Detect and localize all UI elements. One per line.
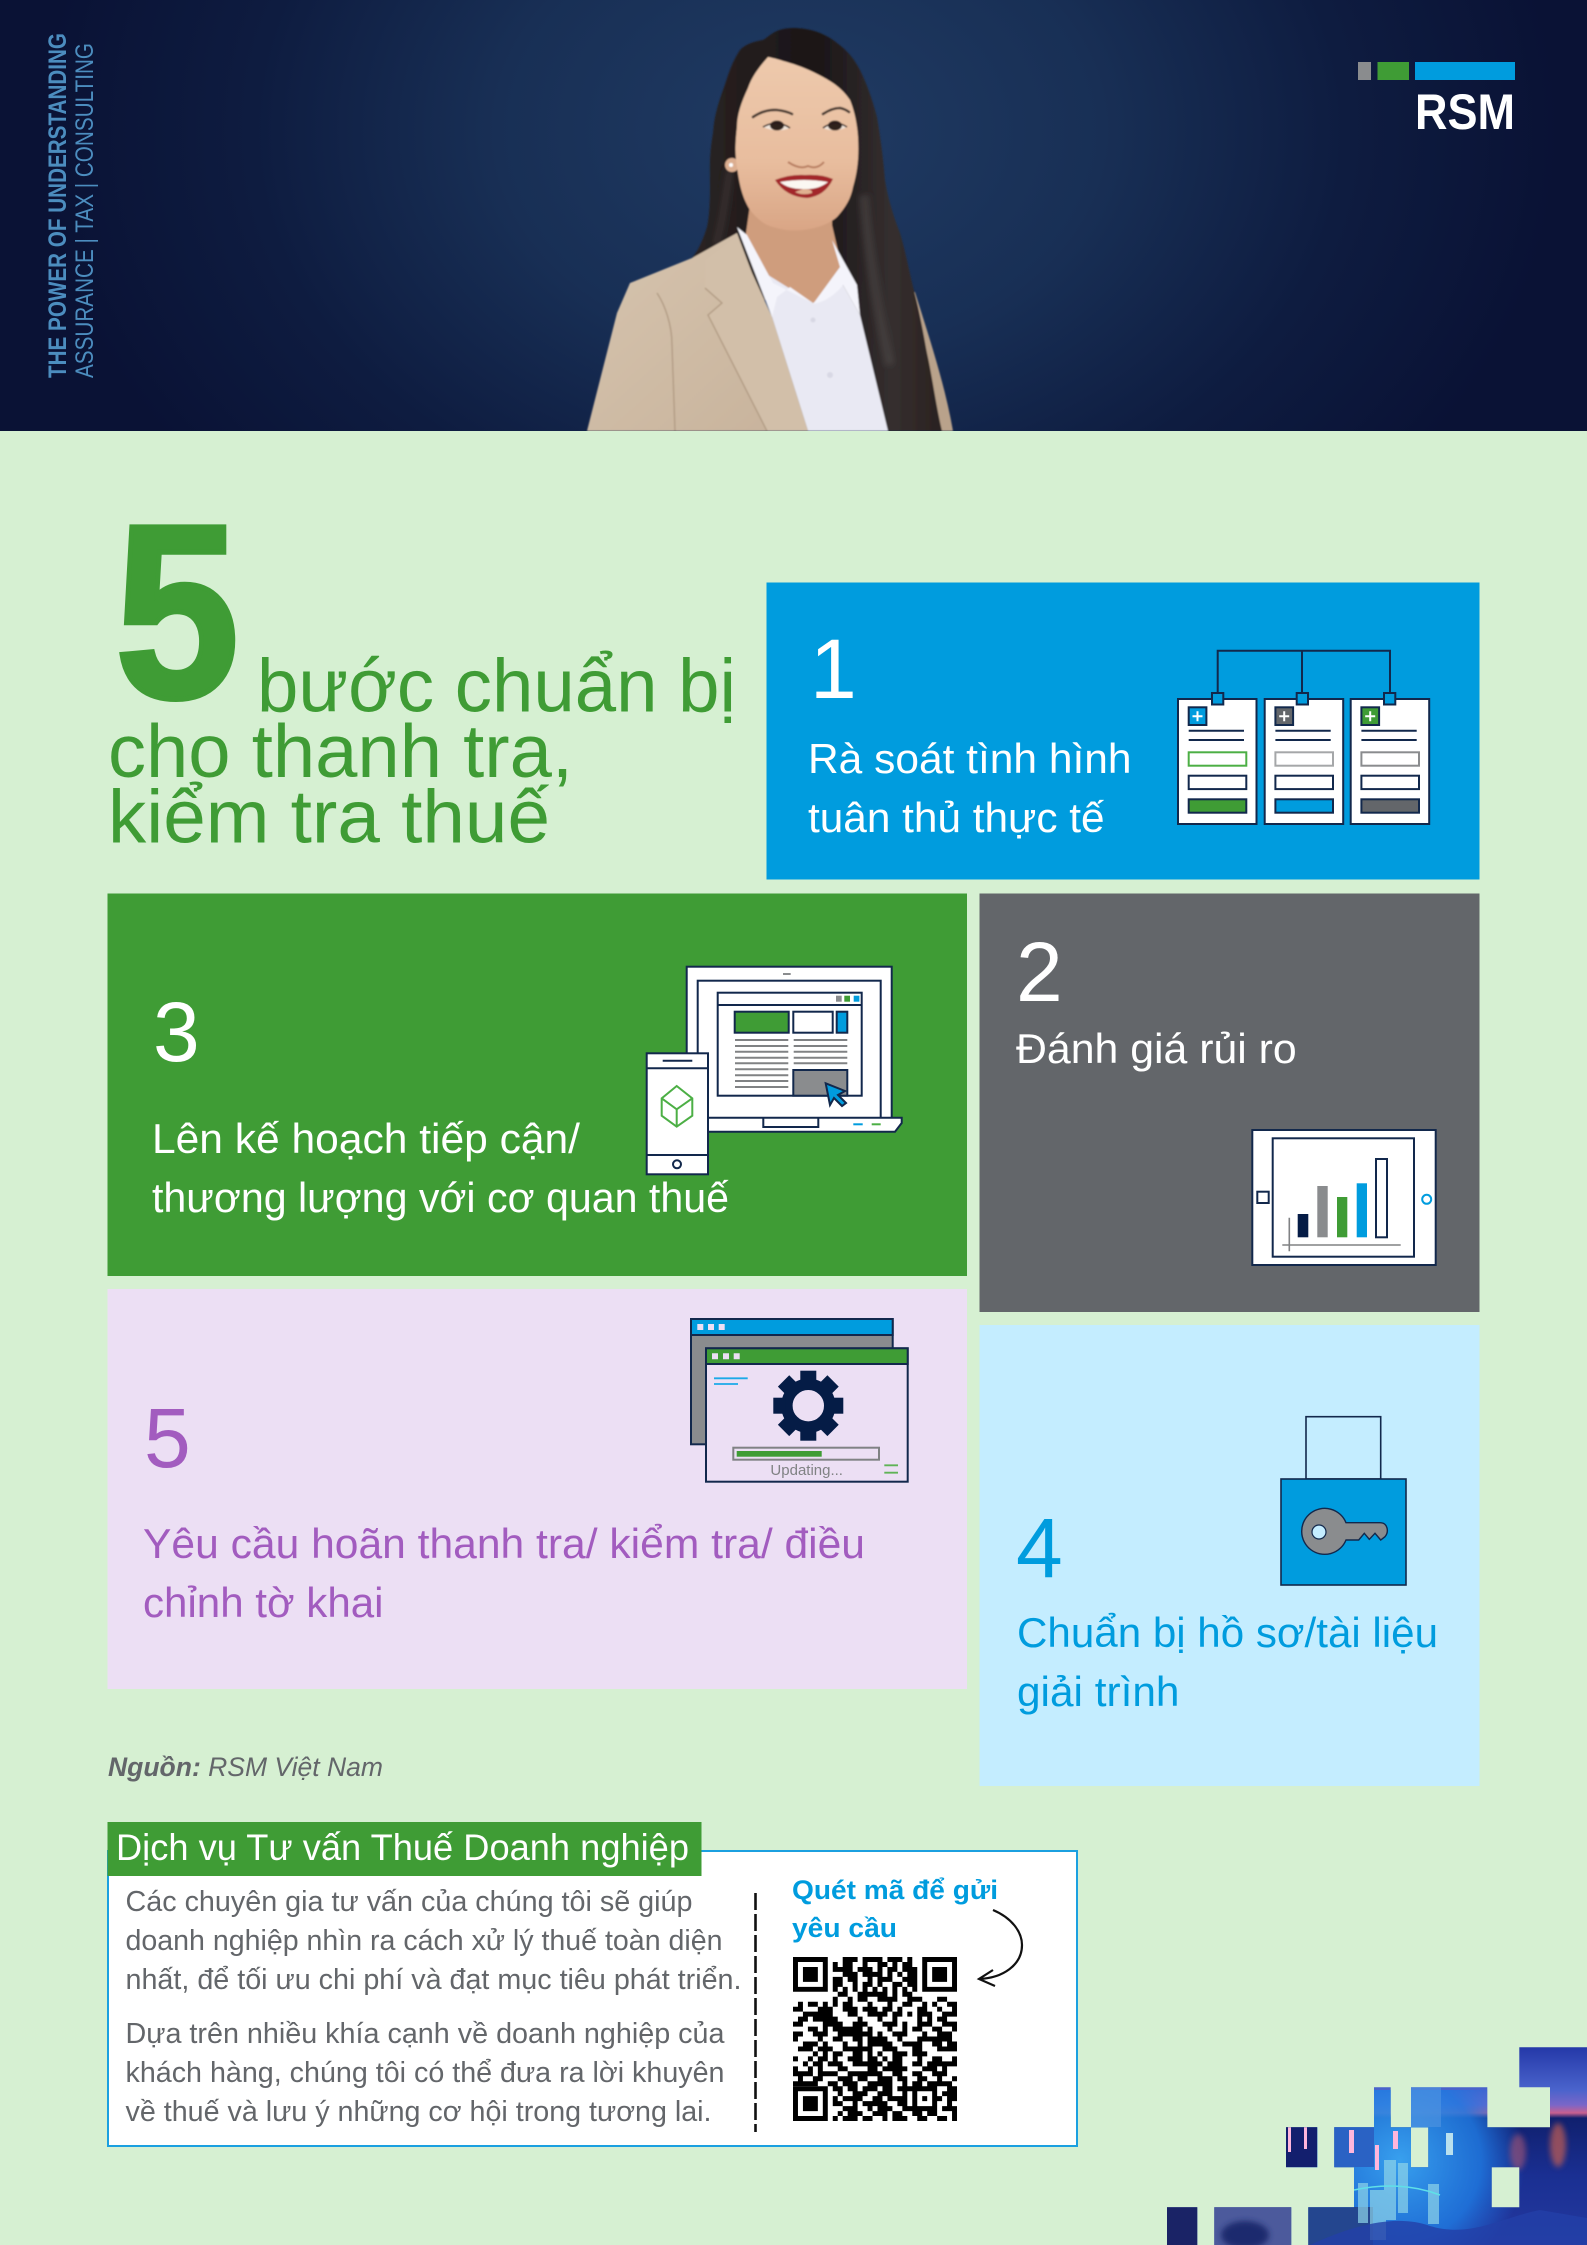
panel: step 4: giải trình [1017, 1668, 1180, 1715]
panel: step 2: Đánh giá rủi ro [1016, 1025, 1297, 1072]
service heading: Dịch vụ Tư vấn Thuế Doanh nghiệp [116, 1827, 689, 1868]
service description: doanh nghiệp nhìn ra cách xử lý thuế toàn diện [126, 1925, 722, 1957]
panel: step 4 [980, 1325, 1480, 1786]
service description: Dựa trên nhiều khía cạnh về doanh nghiệp của [126, 2018, 725, 2050]
title: 5 bước chuẩn bị cho thanh tra, kiểm tra thuế: bước chuẩn bị [257, 644, 736, 728]
icon: three checklists [1178, 651, 1429, 824]
icon: tablet with bar chart [1252, 1130, 1436, 1265]
title: 5 bước chuẩn bị cho thanh tra, kiểm tra thuế: kiểm tra thuế [108, 774, 550, 858]
service description: nhất, để tối ưu chi phí và đạt mục tiêu phát triển. [126, 1964, 742, 1996]
icon: padlock with key [1281, 1417, 1406, 1585]
panel: step 2: 2 [1016, 925, 1063, 1019]
QR call to action: yêu cầu [792, 1913, 897, 1943]
service description [126, 1886, 742, 2128]
panel: step 1 [766, 582, 1480, 880]
panel: corporate tax advisory service [108, 1822, 1077, 2146]
panel: step 4: 4 [1016, 1501, 1063, 1595]
panel: step 5: chỉnh tờ khai [143, 1579, 384, 1626]
QR code [793, 1957, 957, 2121]
panel: step 3: Lên kế hoạch tiếp cận/ [152, 1115, 580, 1162]
icon: software update windows with gear [691, 1319, 908, 1482]
icon: laptop and phone [647, 967, 902, 1174]
vertical tagline [44, 33, 99, 378]
source note: Nguồn: RSM Việt Nam [108, 1752, 383, 1782]
panel: step 1: 1 [810, 622, 857, 716]
title: 5 bước chuẩn bị cho thanh tra, kiểm tra thuế [108, 473, 736, 858]
panel: step 4: Chuẩn bị hồ sơ/tài liệu [1017, 1609, 1438, 1656]
panel: step 1: Rà soát tình hình [808, 735, 1132, 782]
panel: step 3: 3 [153, 985, 200, 1079]
QR call to action: Quét mã để gửi [792, 1875, 998, 1905]
service description: Các chuyên gia tư vấn của chúng tôi sẽ giúp [126, 1886, 692, 1918]
decorative city skyline mosaic [1160, 2040, 1587, 2245]
RSM logo: RSM [1415, 84, 1515, 140]
header banner [0, 0, 1587, 431]
panel: step 5 [108, 1289, 967, 1689]
RSM logo [1358, 62, 1515, 140]
service description: về thuế và lưu ý những cơ hội trong tương lai. [126, 2096, 712, 2128]
QR call to action [792, 1875, 998, 1943]
panel: step 3: thương lượng với cơ quan thuế [152, 1174, 729, 1221]
title: 5 bước chuẩn bị cho thanh tra, kiểm tra thuế: cho thanh tra, [108, 709, 573, 793]
panel: step 1: tuân thủ thực tế [808, 794, 1105, 841]
panel: step 2 [980, 894, 1480, 1312]
service description: khách hàng, chúng tôi có thể đưa ra lời khuyên [126, 2057, 724, 2089]
panel: step 3 [108, 894, 967, 1276]
title: 5 bước chuẩn bị cho thanh tra, kiểm tra thuế: 5 [115, 473, 239, 749]
portrait of a smiling woman [587, 28, 953, 431]
panel: step 5: Yêu cầu hoãn thanh tra/ kiểm tra/ điều [143, 1520, 865, 1567]
arrow to QR code [979, 1910, 1022, 1986]
icon: software update windows with gear: Updating... [770, 1462, 843, 1479]
panel: step 5: 5 [144, 1391, 191, 1485]
